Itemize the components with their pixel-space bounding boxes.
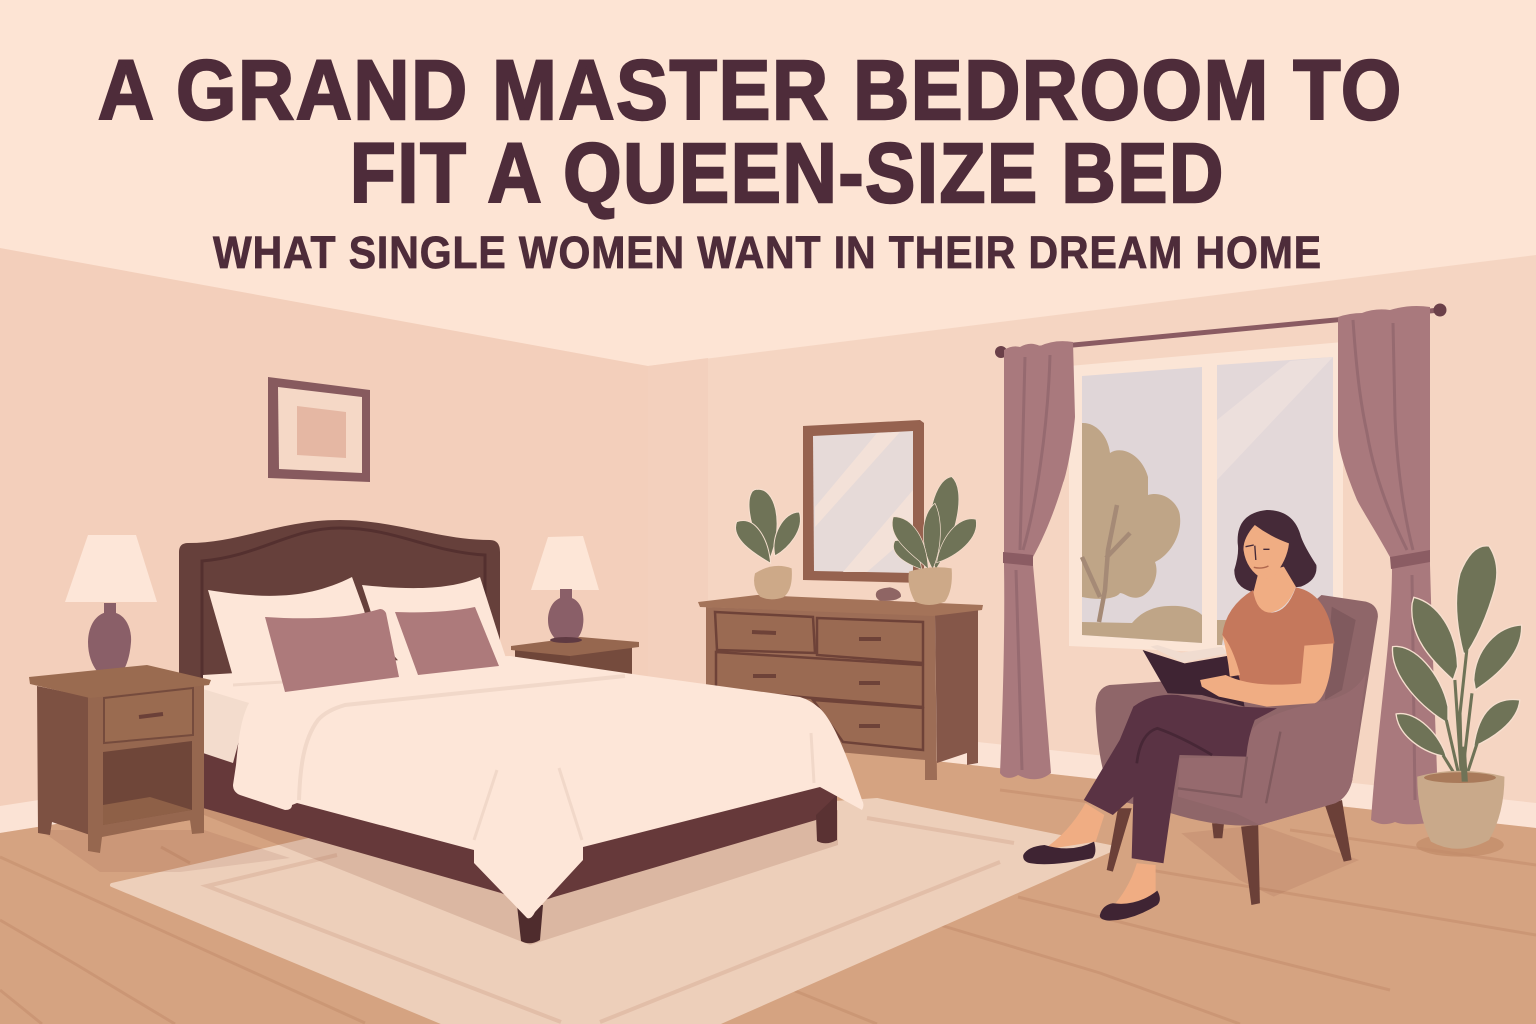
- woman's feet: [1043, 803, 1104, 850]
- wall mirror: [803, 420, 924, 583]
- duvet: [203, 656, 864, 918]
- floor: [0, 729, 1536, 1024]
- mauve pillow, left: [265, 609, 399, 692]
- left nightstand: [29, 665, 211, 853]
- plant on dresser, right: [892, 477, 976, 605]
- woman's shirt: [1222, 587, 1334, 685]
- mauve pillow, right: [395, 607, 499, 675]
- woman's legs: [1084, 695, 1277, 863]
- title line 1: A GRAND MASTER BEDROOM TO: [98, 43, 1403, 137]
- nightstand drawer: [104, 688, 193, 743]
- woman's shoes: [1023, 842, 1095, 864]
- skirting boards: [0, 706, 1536, 833]
- nightstand side: [37, 686, 90, 835]
- mattress side: [203, 686, 249, 763]
- bed: [179, 520, 864, 943]
- left curtain: [1000, 341, 1075, 779]
- duvet flap fold: [299, 676, 625, 800]
- title line 2: FIT A QUEEN-SIZE BED: [350, 126, 1225, 220]
- bed frame: [203, 700, 837, 905]
- rug: [112, 800, 1115, 1024]
- book: [1143, 650, 1245, 707]
- chair back shade: [1325, 607, 1356, 700]
- hills through window: [1082, 606, 1202, 643]
- left lamp: [65, 535, 157, 678]
- duvet fold lines: [474, 733, 814, 840]
- right curtain: [1338, 306, 1437, 824]
- chair shadow: [1181, 825, 1359, 897]
- nightstand front: [88, 683, 204, 853]
- nightstand floor shadow: [40, 830, 290, 872]
- tree through window: [1082, 423, 1180, 599]
- chair body: [1096, 595, 1378, 826]
- dresser top: [698, 595, 983, 616]
- dresser handles: [752, 632, 881, 726]
- woman's arms: [1200, 643, 1333, 707]
- plant leaves: [1392, 546, 1522, 757]
- plant pot: [1417, 771, 1504, 849]
- window: [1069, 342, 1343, 660]
- window glass: [1082, 367, 1202, 643]
- armchair and woman reading: [1023, 510, 1378, 921]
- subtitle: WHAT SINGLE WOMEN WANT IN THEIR DREAM HOME: [213, 227, 1322, 278]
- bed legs: [517, 905, 543, 943]
- plant shadow: [1416, 833, 1504, 857]
- left pillow: [208, 577, 380, 687]
- nightstand shelf: [103, 741, 192, 825]
- trinket on dresser: [876, 587, 901, 601]
- plant on dresser, left: [735, 489, 800, 599]
- tree trunk: [1082, 505, 1130, 622]
- corner wall shade: [648, 358, 708, 740]
- pillow hem: [233, 682, 283, 685]
- woman's hair: [1234, 510, 1317, 592]
- plant stems: [1443, 650, 1477, 780]
- woman's neck: [1253, 567, 1296, 613]
- curtain rod: [995, 304, 1446, 358]
- right nightstand: [511, 637, 639, 680]
- chair legs: [1107, 800, 1352, 905]
- dresser drawers: [715, 612, 923, 750]
- right wall: [648, 255, 1536, 840]
- floor plant: [1392, 546, 1522, 857]
- right lamp: [531, 536, 599, 643]
- nightstand top: [29, 665, 211, 698]
- chair armrest: [1178, 673, 1366, 825]
- framed picture: [268, 377, 370, 482]
- title: [98, 43, 1403, 278]
- right pillow: [362, 577, 510, 676]
- dresser: [698, 595, 983, 780]
- headboard: [179, 520, 500, 690]
- woman's face: [1243, 525, 1289, 579]
- dresser front: [706, 607, 937, 780]
- bed shadow: [204, 790, 838, 945]
- left wall: [0, 248, 648, 840]
- dresser side: [935, 610, 978, 765]
